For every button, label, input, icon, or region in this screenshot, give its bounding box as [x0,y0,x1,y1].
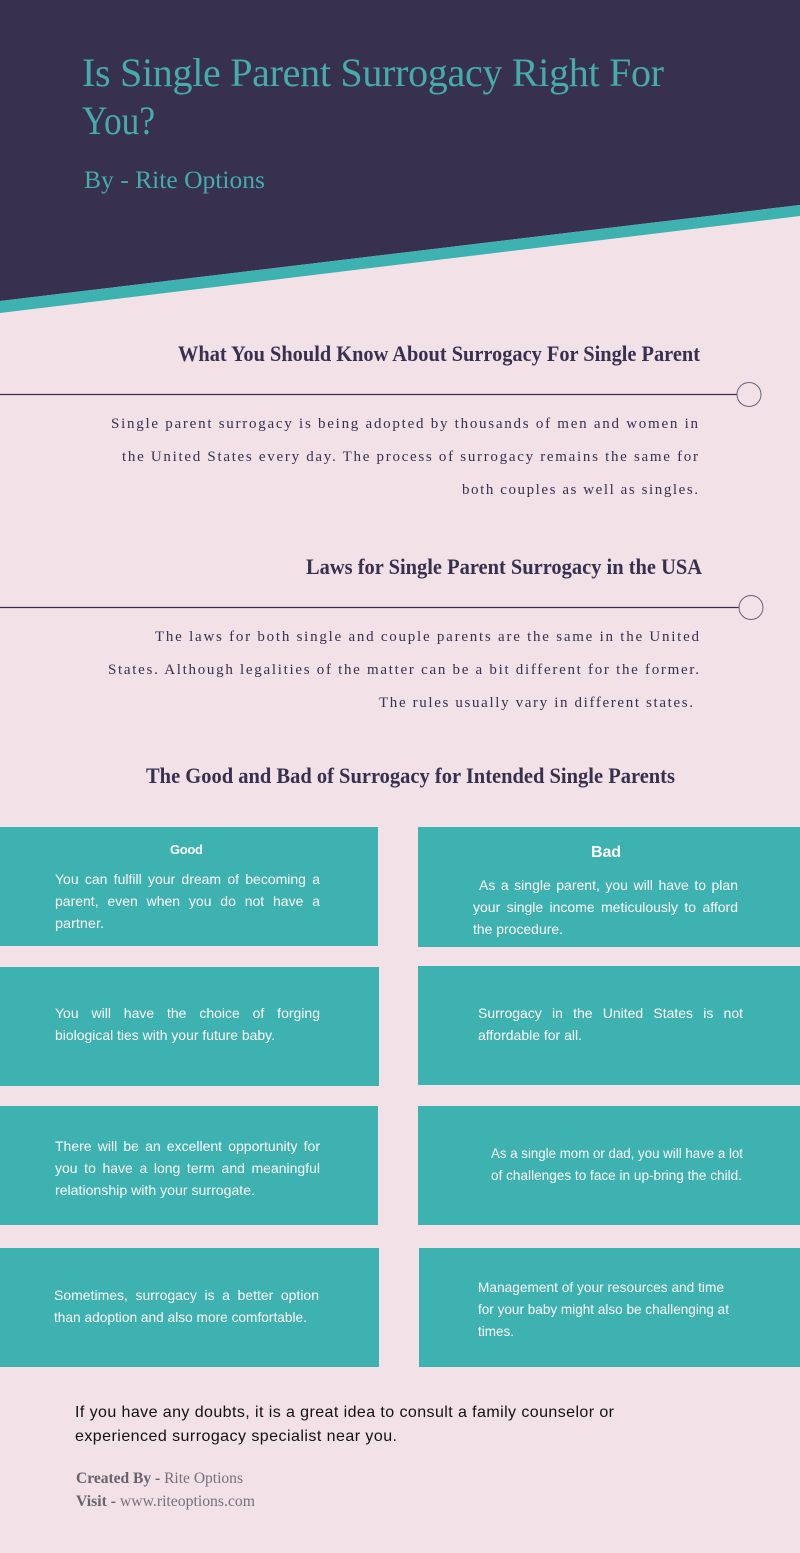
text: bad 1: the procedure. [473,921,563,937]
panel: bad 4 [419,1248,800,1367]
panel: good 4 [0,1248,379,1367]
panel: good 3: There will be an excellent opportunity for [55,1138,320,1154]
paragraph: laws [108,629,699,711]
credits [76,1470,256,1510]
header banner [0,0,800,313]
label: good: Good [170,842,203,857]
text: good 1: You can fulfill your dream of becoming a [55,871,320,887]
text: bad 1: As a single parent, you will have to plan [479,877,738,893]
closing note: If you have any doubts, it is a great idea to consult a family counselor or [75,1404,615,1421]
closing note: experienced surrogacy specialist near you. [75,1428,397,1445]
panel: bad 4: for your baby might also be challenging at [478,1301,729,1317]
paragraph: what you should know: the United States every day. The process of surrogacy remains the same for [122,449,698,465]
credits: Visit - www.riteoptions.com [76,1493,256,1510]
heading: what you should know: What You Should Know About Surrogacy For Single Parent [178,341,700,366]
panel: good 2: You will have the choice of forging [55,1005,320,1021]
panel: good 2: biological ties with your future baby. [55,1027,275,1043]
panel: good 2 [0,967,379,1086]
paragraph: laws: The rules usually vary in different states. [379,695,693,711]
text: bad 1 [473,874,738,937]
panel: bad 1 [418,827,800,947]
panel: bad 2 [418,966,800,1085]
panel: good 3 [0,1106,378,1225]
panel: bad 4: Management of your resources and time [478,1279,724,1295]
panel: good 3: you to have a long term and meaningful [55,1160,320,1176]
panel: bad 3 [418,1106,800,1225]
paragraph: laws: The laws for both single and couple parents are the same in the United [155,629,699,645]
text: good 1 [55,868,320,931]
section: what you should know [0,341,761,498]
title: You? [82,98,155,143]
panel: bad 4: times. [478,1323,514,1339]
section: laws [0,554,763,711]
credits: Created By - Rite Options [76,1470,243,1487]
panel: bad 3: of challenges to face in up-bring the child. [491,1167,742,1183]
heading: good and bad: The Good and Bad of Surrogacy for Intended Single Parents [146,763,675,788]
paragraph: what you should know: both couples as well as singles. [462,482,698,498]
text: good 1: partner. [55,915,104,931]
byline: By - Rite Options [84,167,265,194]
paragraph: what you should know: Single parent surrogacy is being adopted by thousands of men and women in [111,416,698,432]
label: bad: Bad [591,844,621,861]
text: good 1: parent, even when you do not have a [55,893,320,909]
title: Is Single Parent Surrogacy Right For [82,50,664,95]
paragraph: laws: States. Although legalities of the matter can be a bit different for the former. [108,662,699,678]
heading: laws: Laws for Single Parent Surrogacy in the USA [306,554,703,579]
panel: good 4: than adoption and also more comfortable. [54,1309,307,1325]
panel: good 4: Sometimes, surrogacy is a better option [54,1287,319,1303]
paragraph: what you should know [111,416,698,498]
divider with circle [0,596,763,620]
panel: good 3: relationship with your surrogate. [55,1182,255,1198]
title [82,50,664,143]
panel: bad 2: Surrogacy in the United States is not [478,1005,743,1021]
text: bad 1: your single income meticulously to afford [473,899,738,915]
panel: good 1 [0,827,378,946]
panel: bad 3: As a single mom or dad, you will have a lot [491,1145,743,1161]
panel: bad 2: affordable for all. [478,1027,582,1043]
divider with circle [0,382,761,406]
closing note [75,1404,615,1445]
